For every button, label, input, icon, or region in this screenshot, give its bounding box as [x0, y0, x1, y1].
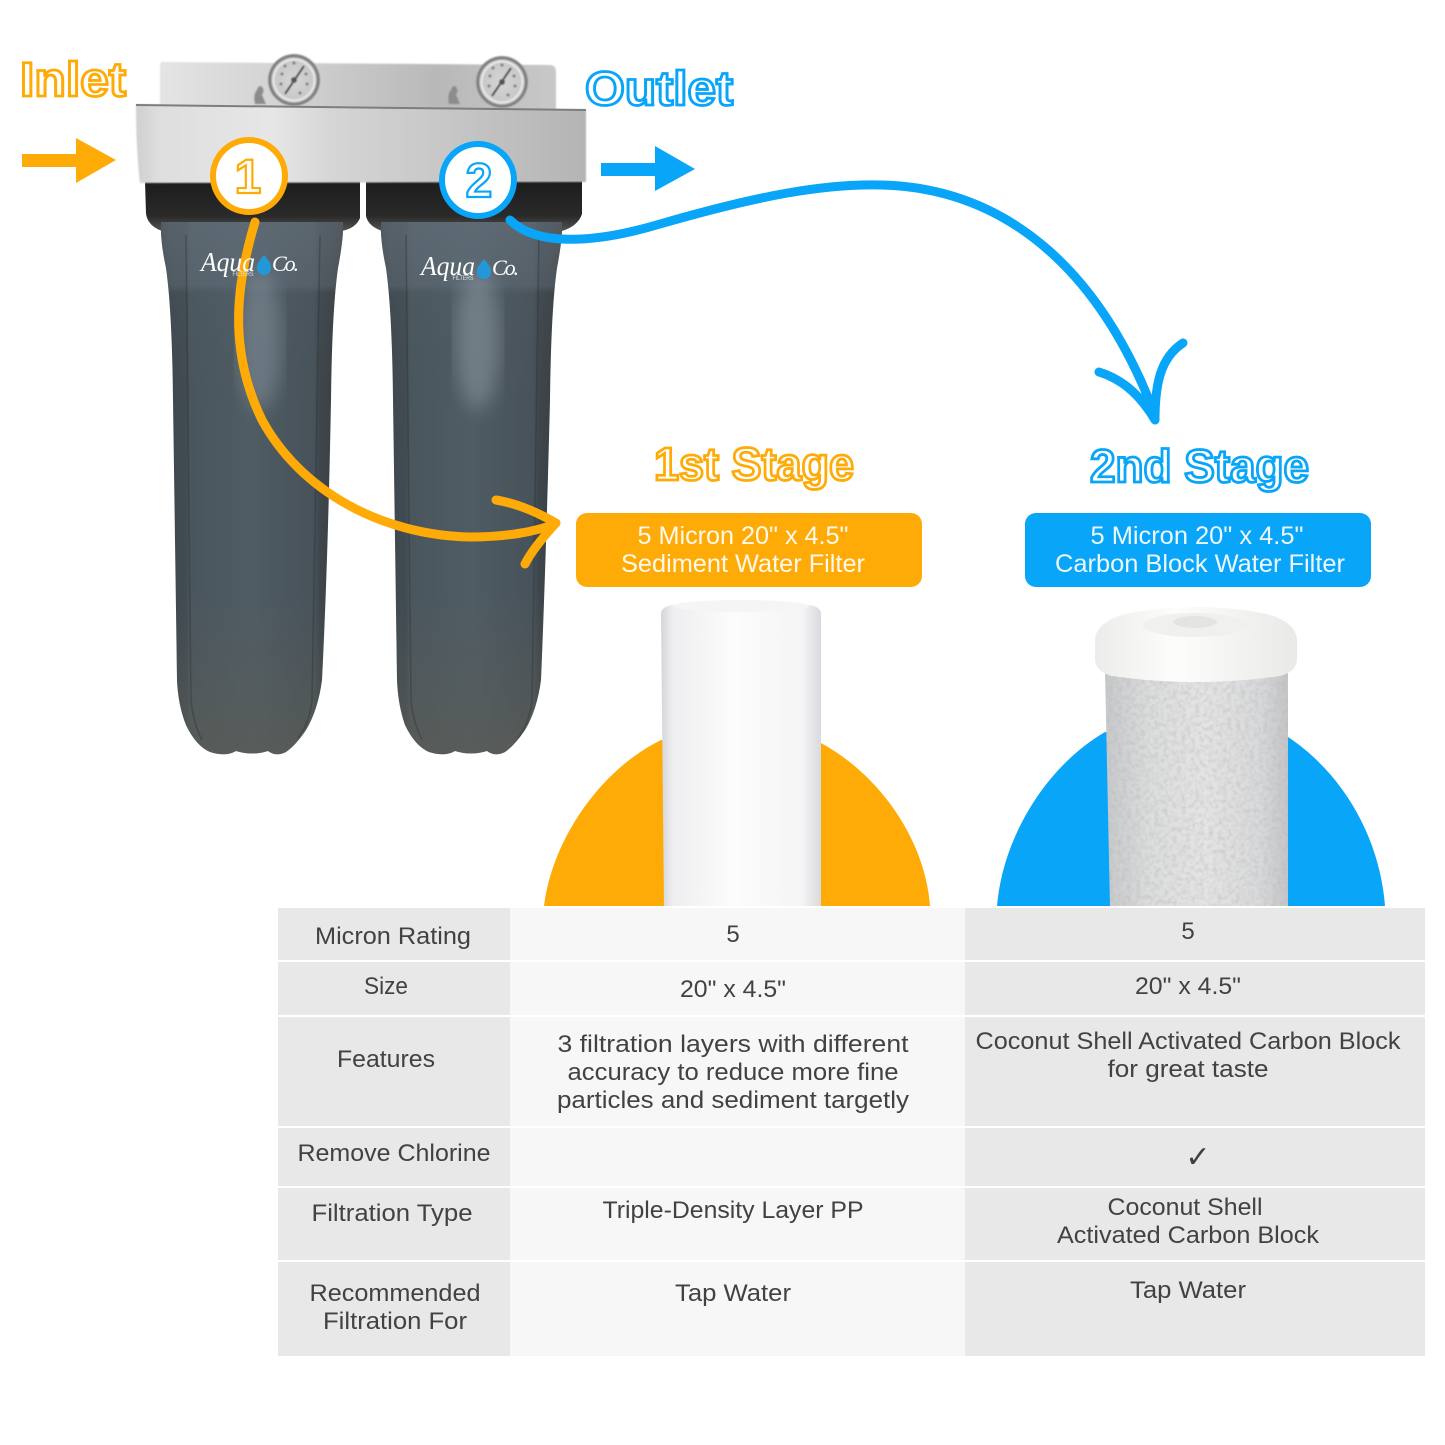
row: size: 20" x 4.5": [680, 976, 786, 1003]
housing ribs and highlights: [186, 235, 539, 740]
row: recommended filtration: [310, 1277, 1246, 1335]
inlet label: Inlet: [20, 54, 126, 107]
stage 2 flow arrow: [510, 185, 1183, 420]
mounting bracket front panel: [136, 104, 586, 183]
logo left: [199, 247, 299, 278]
logo right: [419, 251, 519, 282]
row: remove chlorine: Remove Chlorine: [298, 1140, 490, 1167]
blue dome: [997, 732, 1385, 906]
second stage label: Carbon Block Water Filter: [1055, 550, 1345, 578]
logo right: Aqua: [419, 251, 475, 281]
row: features: Coconut Shell Activated Carbon Block: [976, 1028, 1402, 1055]
row: remove chlorine: ✓: [1185, 1140, 1211, 1175]
row: recommended filtration: Filtration For: [323, 1308, 467, 1335]
second stage heading: 2nd Stage: [1090, 440, 1309, 492]
row: size: [364, 973, 1241, 1003]
right filter black cap: [366, 181, 582, 231]
row: features: particles and sediment targetly: [557, 1087, 909, 1114]
orange dome: [544, 740, 930, 906]
row: size: Size: [364, 973, 408, 1000]
row: filtration type: Activated Carbon Block: [1057, 1222, 1320, 1249]
row: micron rating: 5: [1181, 918, 1195, 945]
row: features: 3 filtration layers with different: [558, 1031, 909, 1058]
comparison table: [278, 908, 1425, 1356]
row: filtration type: Triple-Density Layer PP: [602, 1197, 864, 1224]
carbon block filter cartridge: [1095, 607, 1297, 906]
pressure gauge 1: [254, 54, 320, 106]
number badge 2: 2: [466, 155, 492, 208]
table cell backgrounds: [278, 908, 1425, 1356]
row: size: 20" x 4.5": [1135, 973, 1241, 1000]
logo right: Co.: [492, 255, 519, 280]
first stage label: Sediment Water Filter: [621, 550, 865, 578]
row: filtration type: Coconut Shell: [1108, 1194, 1262, 1221]
number badge 2: [442, 144, 514, 216]
filter housing assembly: [136, 54, 586, 754]
logo left: Co.: [272, 251, 299, 276]
number badge 1: [213, 140, 285, 212]
first stage label: [576, 513, 922, 587]
logo left: FILTERS: [232, 272, 254, 278]
row: recommended filtration: Tap Water: [1130, 1277, 1246, 1304]
second stage label: [1025, 513, 1371, 587]
left filter housing body: [161, 222, 343, 754]
row: features: Features: [337, 1046, 435, 1073]
row: recommended filtration: Recommended: [310, 1280, 480, 1307]
row: filtration type: Filtration Type: [312, 1200, 472, 1227]
pressure gauge 2: [448, 56, 528, 108]
row: features: accuracy to reduce more fine: [568, 1059, 898, 1086]
row: micron rating: Micron Rating: [315, 923, 471, 950]
row: features: [337, 1028, 1402, 1114]
outlet label: Outlet: [585, 63, 733, 116]
number badge 1: 1: [235, 151, 261, 204]
row: micron rating: 5: [726, 921, 740, 948]
outlet arrow: [601, 146, 695, 191]
inlet arrow: [22, 138, 116, 183]
row: features: for great taste: [1108, 1056, 1268, 1083]
left filter black cap: [145, 181, 360, 231]
logo left: Aqua: [199, 247, 255, 277]
first stage label: 5 Micron 20" x 4.5": [638, 522, 848, 550]
row: recommended filtration: Tap Water: [675, 1280, 791, 1307]
second stage label: 5 Micron 20" x 4.5": [1090, 522, 1304, 550]
first stage heading: 1st Stage: [654, 438, 854, 490]
row: remove chlorine: [298, 1140, 1211, 1175]
mounting bracket back plate: [160, 62, 556, 110]
right filter housing body: [381, 222, 562, 754]
sediment filter cartridge: [661, 600, 821, 906]
stage 1 flow arrow: [239, 222, 556, 564]
row: micron rating: [315, 918, 1195, 950]
logo right: FILTERS: [452, 276, 474, 282]
row: filtration type: [312, 1194, 1320, 1249]
